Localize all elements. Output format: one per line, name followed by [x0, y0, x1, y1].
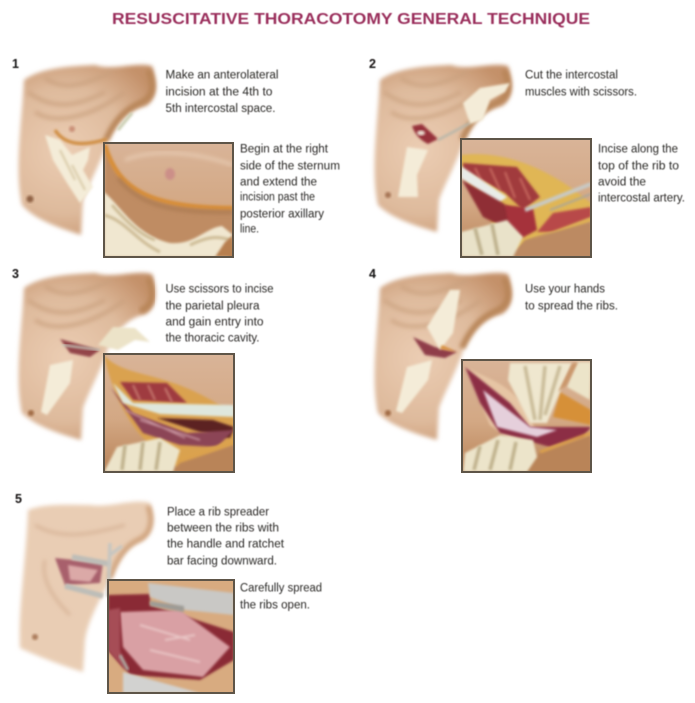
inset: incision close-up	[104, 143, 233, 257]
inset: spreading ribs by hand	[462, 360, 591, 472]
text: spread ribs	[525, 284, 618, 312]
text: pleura entry: Use scissors to incise	[166, 284, 274, 296]
step number 2: 2	[369, 57, 376, 71]
torso illustration 2	[375, 65, 511, 232]
step number 3: 3	[12, 267, 19, 281]
text: incise along rib	[598, 144, 685, 204]
text: incision extent: and extend the	[240, 176, 317, 188]
text: incise along rib: top of the rib to	[598, 160, 679, 172]
text: incision extent: incision past the	[240, 192, 315, 204]
text: incise along rib: Incise along the	[598, 144, 678, 156]
text: pleura entry: the thoracic cavity.	[166, 332, 260, 344]
text: incision extent: Begin at the right	[240, 144, 329, 156]
text: pleura entry: the parietal pleura	[166, 300, 260, 312]
text: cut muscles: Cut the intercostal	[525, 70, 618, 82]
torso illustration 1	[19, 65, 155, 235]
panel: step 3	[12, 267, 274, 472]
text: spread ribs: Use your hands	[525, 284, 605, 296]
text: spread open	[240, 582, 322, 612]
text: incision location	[166, 70, 278, 115]
text: pleura entry: and gain entry into	[166, 316, 264, 328]
inset: incising parietal pleura	[104, 354, 234, 472]
text: place rib spreader: the handle and ratchet	[167, 538, 285, 550]
text: place rib spreader	[167, 506, 285, 568]
panel: step 5	[15, 492, 322, 693]
text: place rib spreader: between the ribs with	[167, 522, 279, 534]
text: cut muscles	[525, 70, 637, 98]
text: place rib spreader: bar facing downward.	[167, 556, 277, 568]
torso illustration 3	[19, 273, 155, 440]
torso illustration with rib spreader	[20, 502, 152, 672]
panel: step 1	[12, 57, 340, 257]
text: spread open: Carefully spread	[240, 582, 322, 594]
title: RESUSCITATIVE THORACOTOMY GENERAL TECHNIQUE	[112, 11, 590, 28]
panel: step 2	[369, 57, 685, 257]
text: incision extent: line.	[240, 224, 259, 236]
text: incision location: incision at the 4th to	[166, 86, 272, 98]
text: spread ribs: to spread the ribs.	[525, 300, 618, 312]
text: place rib spreader: Place a rib spreader	[167, 506, 269, 518]
text: spread open: the ribs open.	[240, 600, 310, 612]
text: incision location: 5th intercostal space.	[166, 103, 276, 115]
inset: rib spreader close-up	[108, 580, 234, 693]
text: incision extent: posterior axillary	[240, 208, 324, 220]
text: incision location: Make an anterolateral	[166, 70, 278, 82]
text: incision extent: side of the sternum	[240, 160, 340, 172]
step number 5: 5	[15, 492, 22, 506]
panel: step 4	[369, 267, 618, 472]
text: incision extent	[240, 144, 340, 236]
step number 4: 4	[369, 267, 376, 281]
step number 1: 1	[12, 57, 19, 71]
text: incise along rib: intercostal artery.	[598, 192, 685, 204]
text: pleura entry	[166, 284, 274, 344]
text: incise along rib: avoid the	[598, 176, 646, 188]
torso illustration 4	[375, 273, 511, 440]
text: cut muscles: muscles with scissors.	[525, 86, 637, 98]
inset: cutting intercostal muscles	[461, 139, 591, 257]
